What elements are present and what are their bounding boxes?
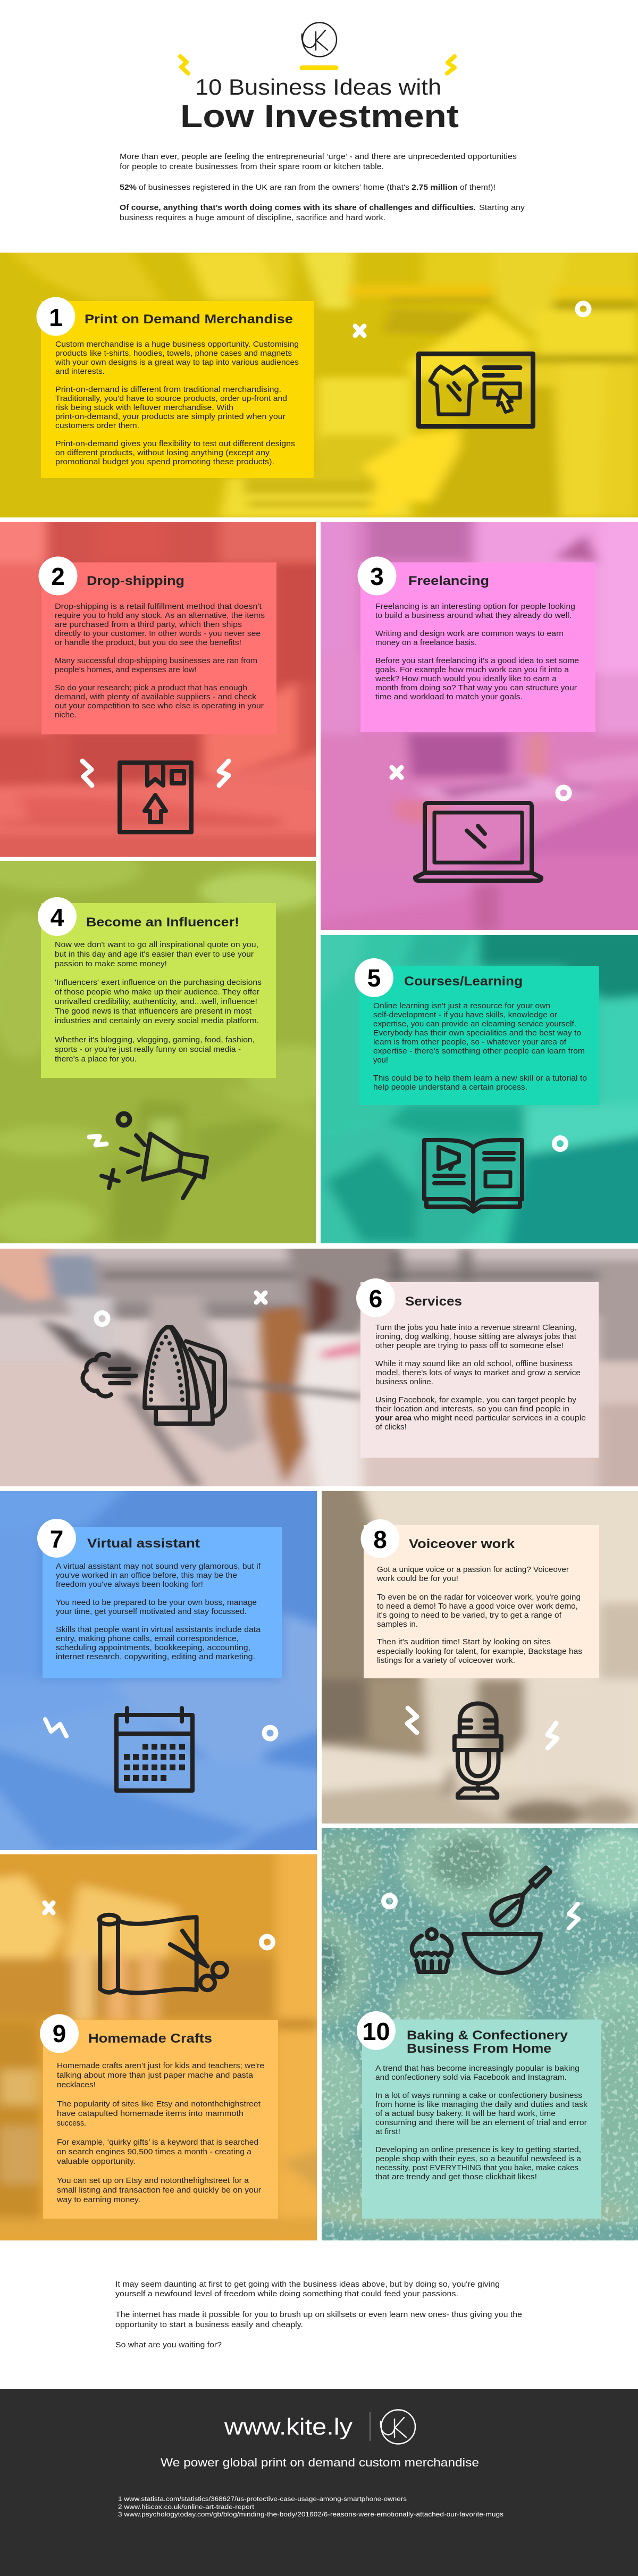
body text	[56, 1562, 261, 1661]
body text: or handle the product, but you do see the benefits!	[55, 639, 241, 647]
body text	[56, 2062, 264, 2204]
body text: industries and certainly on every social media platform.	[55, 1017, 259, 1025]
heading	[407, 2028, 568, 2056]
number badge: 4	[51, 904, 64, 931]
closing text	[115, 2280, 522, 2349]
background photo: teal cinnamon buns	[322, 1828, 638, 2240]
number badge: 3	[370, 563, 384, 590]
body text: expertise, you can provide an elearning service yourself.	[373, 1020, 576, 1028]
icon: laptop	[415, 803, 541, 881]
body text: A trend that has become increasingly popular is baking	[375, 2064, 580, 2073]
body text	[373, 1002, 587, 1092]
heading: Freelancing	[408, 574, 489, 588]
text card	[43, 2020, 278, 2219]
background photo: studio desk	[309, 1482, 638, 1833]
body text: business online.	[375, 1378, 433, 1386]
number badge: 7	[50, 1525, 63, 1553]
icon: parcel box with arrow	[120, 763, 191, 832]
decoration: x and o	[355, 303, 589, 336]
icon: megaphone	[102, 1114, 207, 1198]
body text: especially looking for talent, for example, Backstage has	[377, 1647, 582, 1656]
body text: demand, with plenty of available suppliers - and check	[55, 693, 257, 701]
body text: sports - or you're just really funny on social media -	[55, 1046, 241, 1054]
body text: that are trendy and get those clickbait likes!	[375, 2173, 537, 2181]
body text: with your own designs is a great way to tap into various audiences	[55, 358, 299, 367]
body text	[55, 340, 299, 466]
footer	[0, 2389, 638, 2576]
icon: microphone	[455, 1703, 501, 1797]
number badge: 5	[367, 964, 381, 992]
body text: and interests.	[55, 367, 105, 376]
body text: In a lot of ways running a cake or confectionery business	[375, 2092, 582, 2100]
body text: their location and interests, so you can find people in	[375, 1405, 569, 1414]
body text: and confectionery sold via Facebook and Instagram.	[375, 2073, 567, 2082]
body text: out your competition to see who else is operating in your	[55, 702, 264, 710]
body text: Print-on-demand gives you flexibility to test out different designs	[55, 440, 295, 448]
body text: on search engines 90,500 times a month - creating a	[57, 2148, 252, 2156]
body text: from home is like managing the daily and duties and task	[375, 2101, 588, 2109]
closing text: The internet has made it possible for you to brush up on skillsets or even learn new ones- thus giving you the	[115, 2311, 522, 2319]
body text: Drop-shipping is a retail fulfillment method that doesn't	[55, 603, 262, 611]
body text: Developing an online presence is key to getting started,	[375, 2146, 581, 2154]
body text: other people are trying to pass off to someone else!	[375, 1342, 564, 1350]
intro text: business requires a huge amount of discipline, sacrifice and hard work.	[120, 214, 385, 222]
background photo: dogs on leads	[0, 1241, 638, 1496]
panel: 8 voiceover	[309, 1482, 638, 1833]
header	[120, 22, 525, 222]
body text: Writing and design work are common ways to earn	[375, 630, 564, 638]
references	[118, 2496, 503, 2518]
body text: to need a demo! To have a good voice over work demo,	[377, 1602, 578, 1611]
heading: Courses/Learning	[404, 974, 523, 989]
body text: products like t-shirts, hoodies, towels, phone cases and magnets	[55, 349, 292, 358]
icon: steam iron	[83, 1327, 225, 1424]
text card	[359, 966, 599, 1105]
body text: entry, making phone calls, email correspondence,	[56, 1635, 239, 1643]
body text: at first!	[375, 2128, 400, 2136]
closing text: opportunity to start a business easily and cheaply.	[115, 2321, 303, 2329]
decoration: o and zigzag	[384, 1895, 578, 1928]
body text: This could be to help them learn a new skill or a tutorial to	[373, 1074, 587, 1083]
body text: You need to be prepared to be your own boss, manage	[56, 1599, 257, 1607]
closing text: It may seem daunting at first to get going with the business ideas above, but by doing so, you're giving	[115, 2280, 500, 2289]
number badge	[38, 556, 78, 596]
panel: 7 virtual assistant	[0, 1491, 317, 1850]
number badge	[37, 1519, 76, 1558]
body text: goals. For example how much work can you fit into a	[375, 666, 569, 674]
website address: www.kite.ly	[224, 2414, 352, 2440]
body text: month from doing so? That way you can structure your	[375, 684, 577, 692]
body text: require you to hold any stock. As an alternative, the items	[55, 612, 265, 620]
body text: Online learning isn't just a resource for your own	[373, 1002, 550, 1010]
body text: internet research, copywriting, editing and marketing.	[56, 1653, 255, 1661]
text card	[362, 2020, 601, 2219]
body text: While it may sound like an old school, offline business	[375, 1360, 573, 1368]
body text: Traditionally, you'd have to source products, order up-front and	[55, 395, 287, 403]
references: 3 www.psychologytoday.com/gb/blog/minding-the-body/201602/6-reasons-were-emotionally-attached-our-favorite-mugs	[118, 2512, 503, 2518]
decoration: x and o	[96, 1293, 265, 1324]
body text: Now we don't want to go all inspirational quote on you,	[55, 941, 258, 949]
body text	[55, 603, 265, 720]
heading: Print on Demand Merchandise	[85, 312, 293, 327]
body text: consuming and there will be an element of trial and error	[375, 2119, 587, 2127]
body text: of clicks!	[375, 1423, 407, 1432]
body text: way to earning money.	[56, 2196, 140, 2204]
body text: So do your research; pick a product that has enough	[55, 684, 247, 692]
tagline: We power global print on demand custom merchandise	[161, 2456, 479, 2469]
body text: your time, get yourself motivated and stay focussed.	[56, 1608, 247, 1616]
icon: open book	[424, 1140, 522, 1211]
body text: Many successful drop-shipping businesses are ran from	[55, 657, 257, 665]
text card	[360, 563, 595, 732]
number badge	[355, 958, 393, 997]
body text: expertise - there's something other people can learn from	[373, 1047, 585, 1056]
title: Low Investment	[180, 98, 459, 134]
body text	[55, 941, 262, 1064]
body text: 'Influencers' exert influence on the purchasing decisions	[55, 978, 262, 987]
intro text: of them!)!	[460, 183, 496, 192]
body text: unrivalled credibility, authenticity, and...well, influence!	[55, 998, 257, 1006]
heading: Homemade Crafts	[88, 2031, 212, 2046]
body text: The popularity of sites like Etsy and notonthehighstreet	[57, 2100, 261, 2109]
text card	[41, 903, 276, 1078]
number badge	[360, 1519, 400, 1558]
intro text: 2.75 million	[412, 183, 458, 192]
closing text: So what are you waiting for?	[115, 2341, 222, 2349]
body text: necklaces!	[57, 2081, 96, 2089]
body text: Then it's audition time! Start by looking on sites	[377, 1638, 551, 1646]
body text: learn is from other people, so - whatever your area of	[373, 1038, 567, 1047]
body text: A virtual assistant may not sound very glamorous, but if	[56, 1562, 261, 1571]
number badge: 2	[51, 563, 65, 590]
references: 1 www.statista.com/statistics/368627/us-protective-case-usage-among-smartphone-owners	[118, 2496, 407, 2503]
text card	[41, 301, 314, 478]
panel: 10 baking	[322, 1828, 638, 2240]
intro text	[120, 153, 525, 222]
body text: on different products, without losing anything (except any	[55, 449, 270, 457]
body text: freedom you've always been looking for!	[56, 1580, 203, 1589]
decoration: zigzags	[82, 761, 229, 785]
heading: Voiceover work	[409, 1537, 515, 1551]
body text: Print-on-demand is different from traditional merchandising.	[55, 386, 281, 394]
body text: Whether it's blogging, vlogging, gaming, food, fashion,	[55, 1036, 255, 1044]
number badge: 10	[363, 2018, 390, 2045]
body text: small listing and transaction fee and quickly be on your	[57, 2186, 261, 2195]
body text: it's going to need to be varied, try to get a range of	[377, 1611, 562, 1620]
background photo: red parcels	[0, 522, 316, 857]
icon: fabric roll and scissors	[99, 1915, 227, 1993]
intro text: 52%	[120, 183, 137, 192]
decoration: yellow zigzags and bar	[180, 56, 455, 73]
body text: promotional budget you spend promoting these products).	[55, 458, 274, 466]
body text: directly to your customer. In other words - you never see	[55, 630, 261, 638]
background photo: teal laptop and notebook	[321, 935, 638, 1243]
background photo: yellow laptop	[0, 250, 638, 517]
body text: of those people who make up their audience. They offer	[55, 988, 259, 997]
text card	[43, 1527, 282, 1678]
body text: passion to make some money!	[55, 960, 167, 968]
text card	[364, 1525, 599, 1678]
panel: 2 drop-shipping	[0, 522, 316, 857]
heading: Drop-shipping	[87, 574, 184, 588]
decoration: o	[554, 1138, 566, 1150]
number badge: 9	[53, 2020, 66, 2047]
panel: 9 homemade crafts	[0, 1849, 334, 2240]
heading: Business From Home	[407, 2042, 551, 2056]
number badge	[357, 556, 397, 596]
body text: people shop with their eyes, so a beautiful newsfeed is a	[375, 2155, 582, 2163]
heading: Virtual assistant	[87, 1536, 200, 1551]
number badge	[38, 897, 77, 936]
body text: To even be on the radar for voiceover work, you're going	[377, 1593, 581, 1602]
body text: your area	[375, 1414, 412, 1423]
body text: print-on-demand, your products are simply printed when your	[55, 413, 286, 421]
body text: who might need particular services in a couple	[413, 1414, 586, 1423]
body text: Custom merchandise is a huge business opportunity. Customising	[55, 340, 299, 349]
number badge: 8	[373, 1526, 387, 1553]
body text: Homemade crafts aren’t just for kids and teachers; we're	[57, 2062, 264, 2070]
decoration: lightning and o	[45, 1719, 276, 1739]
decoration: x and o	[392, 767, 569, 799]
body text: work could be for you!	[376, 1575, 458, 1583]
body text: you!	[373, 1056, 388, 1065]
body text: self-development - if you have skills, knowledge or	[373, 1011, 557, 1019]
body text: you've worked in an office before, this may be the	[56, 1571, 237, 1580]
body text: success.	[57, 2119, 86, 2128]
body text: The good news is that influencers are present in most	[55, 1007, 251, 1016]
decoration: white squiggle	[89, 1136, 106, 1145]
body text: For example, ‘quirky gifts’ is a keyword that is searched	[57, 2138, 258, 2147]
body text: valuable opportunity.	[57, 2157, 136, 2166]
body text: Turn the jobs you hate into a revenue stream! Cleaning,	[375, 1324, 577, 1332]
number badge	[356, 1278, 395, 1317]
intro text: More than ever, people are feeling the entrepreneurial ‘urge’ - and there are unprecedented opportunities	[120, 153, 517, 161]
body text	[375, 603, 579, 701]
logo: Kite circle mark	[302, 22, 337, 56]
body text: week? How much would you ideally like to earn a	[375, 675, 557, 683]
panel: 1 print on demand	[0, 250, 638, 517]
panel: 5 courses	[321, 935, 638, 1243]
background photo: pink desk	[309, 513, 638, 941]
text card	[360, 1282, 599, 1458]
intro text: Of course, anything that’s worth doing comes with its share of challenges and difficulties.	[120, 204, 476, 212]
closing text: yourself a newfound level of freedom while doing something that could feed your passions.	[115, 2290, 458, 2298]
body text: model, there's lots of ways to market and grow a service	[375, 1369, 581, 1377]
decoration: x and o	[45, 1903, 273, 1948]
body text: Skills that people want in virtual assistants include data	[56, 1626, 261, 1634]
body text: to build a business around what they already do well.	[375, 612, 572, 620]
text card	[41, 563, 276, 734]
background photo: blue keyboard and hands	[0, 1491, 317, 1850]
intro text: Starting any	[479, 204, 525, 212]
heading: Become an Influencer!	[86, 915, 239, 930]
decoration: zigzags	[407, 1708, 557, 1748]
body text: ironing, dog walking, house sitting are always jobs that	[375, 1333, 576, 1341]
body text: scheduling appointments, bookkeeping, accounting,	[56, 1644, 250, 1652]
body text: risk being stuck with leftover merchandise. With	[55, 404, 233, 412]
body text: Using Facebook, for example, you can target people by	[375, 1396, 577, 1404]
title: 10 Business Ideas with	[195, 74, 441, 99]
body text: talking about more than just paper mache and pasta	[57, 2071, 254, 2080]
body text: time and workload to match your goals.	[375, 693, 523, 701]
number badge: 6	[369, 1285, 382, 1312]
panel: 6 services	[0, 1241, 638, 1496]
body text: Freelancing is an interesting option for people looking	[375, 603, 575, 611]
references: 2 www.hiscox.co.uk/online-art-trade-report	[118, 2504, 255, 2511]
body text: of a actual busy bakery. It will be hard work, time	[375, 2110, 556, 2118]
body text	[376, 1566, 582, 1665]
number badge	[36, 297, 75, 336]
icon: whisk, bowl and cupcake	[412, 1868, 550, 1973]
body text: help people understand a certain process.	[373, 1083, 527, 1092]
body text: Got a unique voice or a passion for acting? Voiceover	[377, 1566, 569, 1574]
body text: there's a place for you.	[55, 1055, 137, 1064]
panel: 4 influencer	[0, 861, 316, 1243]
title	[180, 74, 459, 134]
number badge	[357, 2011, 396, 2050]
heading: Baking & Confectionery	[407, 2028, 568, 2043]
body text: but in this day and age it's easier than ever to use your	[55, 950, 254, 959]
intro text: for people to create businesses from their spare room or kitchen table.	[120, 163, 384, 171]
icon: shop window with t-shirt	[419, 354, 533, 426]
body text: have catapulted homemade items into mammoth	[57, 2110, 244, 2118]
body text: samples in.	[377, 1620, 418, 1629]
body text: listings for a variety of voiceover work.	[377, 1657, 515, 1665]
number badge: 1	[49, 304, 63, 331]
body text: customers order them.	[55, 422, 139, 430]
panel: 3 freelancing	[309, 513, 638, 941]
heading: Services	[405, 1294, 462, 1309]
background photo: orange craft shelves	[0, 1849, 334, 2240]
body text: money on a freelance basis.	[375, 639, 477, 647]
body text: You can set up on Etsy and notonthehighstreet for a	[57, 2177, 249, 2185]
icon: calendar	[116, 1708, 192, 1791]
divider and logo	[370, 2410, 415, 2444]
body text	[375, 2064, 588, 2181]
body text: necessity, post EVERYTHING that you bake, make cakes	[375, 2164, 578, 2172]
body text: Everybody has their own specialities and the best way to	[373, 1029, 581, 1038]
body text: Before you start freelancing it's a good idea to set some	[375, 657, 579, 665]
background photo: green phone in hand	[0, 861, 316, 1243]
body text: people's homes, and expenses are low!	[55, 666, 197, 674]
body text: are purchased from a third party, which then ships	[55, 621, 242, 629]
body text: niche.	[55, 711, 77, 720]
intro text: of businesses registered in the UK are ran from the owners’ home (that's	[139, 183, 409, 192]
body text	[375, 1324, 586, 1432]
number badge	[40, 2014, 79, 2053]
